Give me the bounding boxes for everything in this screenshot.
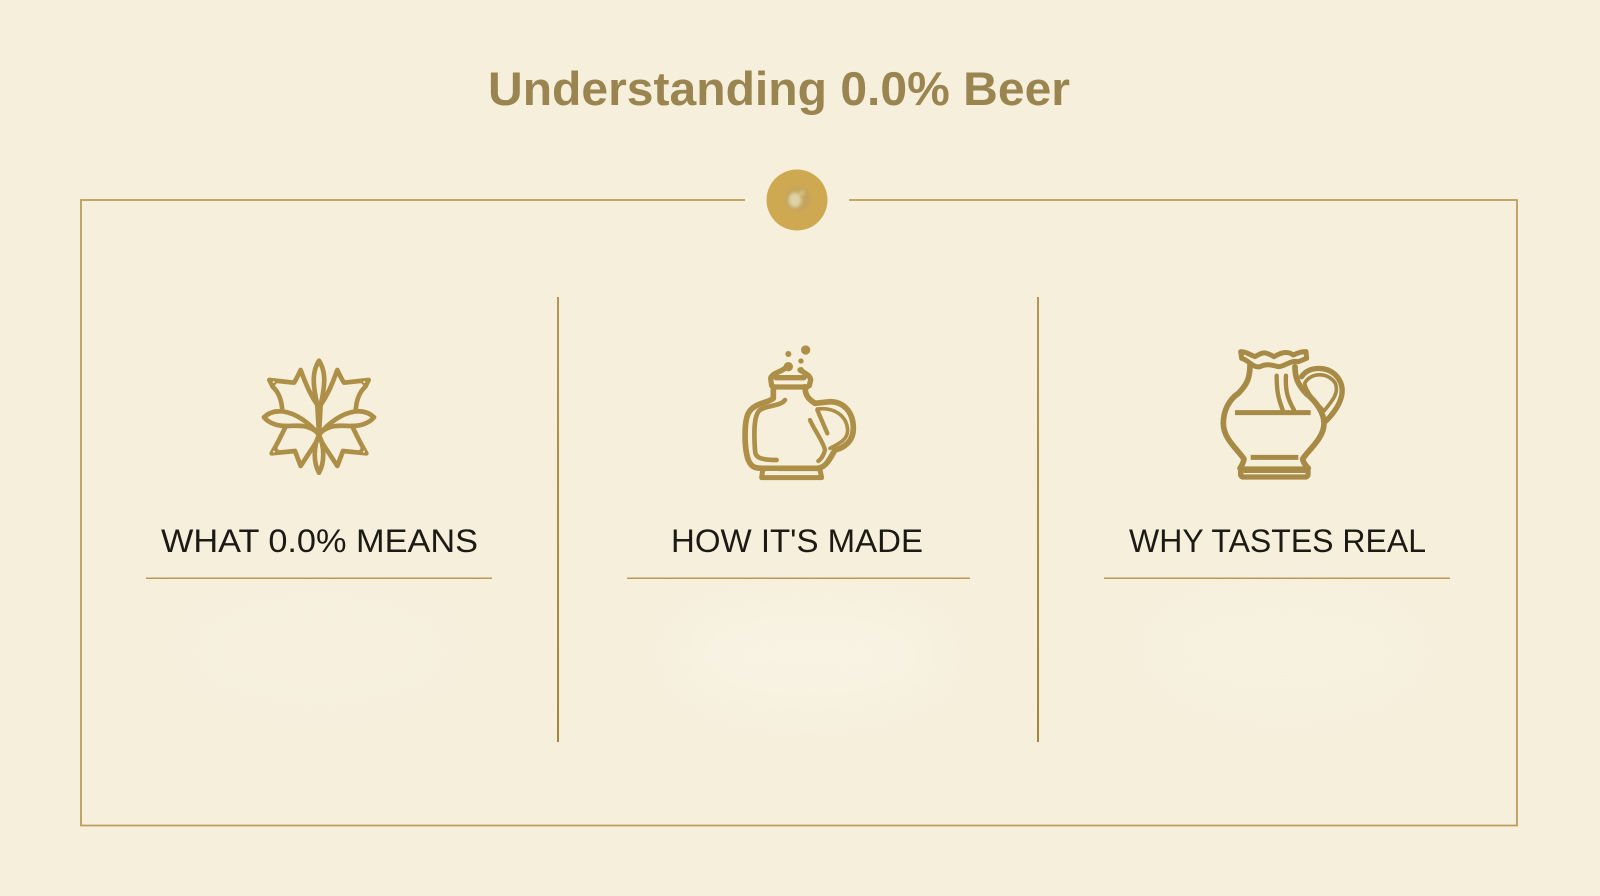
underline bbox=[146, 578, 492, 579]
heading: HOW IT'S MADE bbox=[671, 523, 923, 559]
heading: WHY TASTES REAL bbox=[1129, 523, 1426, 559]
panel: how it's made bbox=[627, 345, 970, 579]
underline bbox=[1104, 578, 1450, 579]
icon: pitcher bbox=[1223, 352, 1342, 478]
heading: WHAT 0.0% MEANS bbox=[161, 523, 478, 559]
panel: why tastes real bbox=[1104, 352, 1450, 579]
icon: hop flower bbox=[264, 361, 374, 473]
underline bbox=[627, 578, 970, 579]
icon: gold seal bbox=[766, 170, 828, 230]
panel: main frame bbox=[81, 200, 1517, 826]
divider: left bbox=[557, 297, 559, 742]
divider: right bbox=[1037, 297, 1039, 742]
title: Understanding 0.0% Beer bbox=[488, 62, 1070, 115]
icon: foaming jug bbox=[745, 345, 853, 478]
panel: what 0.0% means bbox=[146, 361, 492, 579]
